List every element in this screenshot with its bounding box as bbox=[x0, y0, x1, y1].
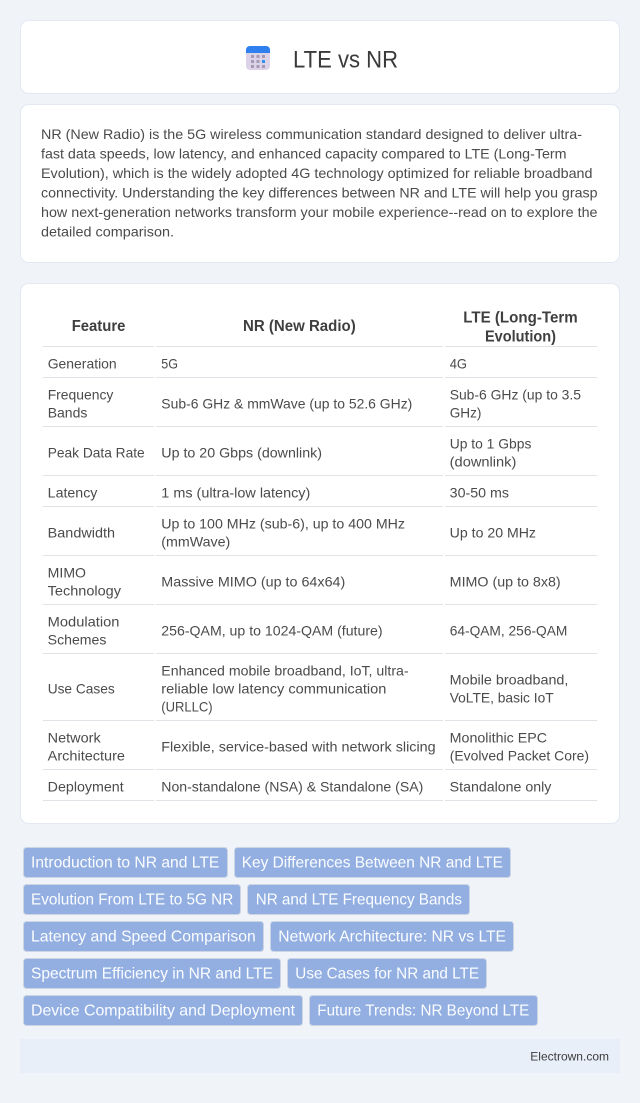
icon: calendar bbox=[246, 46, 270, 70]
row: frequency bands: Bands bbox=[48, 404, 87, 420]
intro paragraph: fast data speeds, low latency, and enhanced capacity compared to LTE (Long-Term bbox=[41, 145, 566, 161]
intro paragraph: Evolution), which is the widely adopted 4G technology optimized for reliable broadband bbox=[41, 165, 592, 181]
footer bbox=[20, 1039, 620, 1073]
intro paragraph: NR (New Radio) is the 5G wireless communication standard designed to deliver ultra- bbox=[41, 126, 582, 142]
row: modulation schemes: 256-QAM, up to 1024-QAM (future) bbox=[161, 622, 383, 638]
row: bandwidth: (mmWave) bbox=[161, 533, 230, 549]
row: modulation schemes: Modulation bbox=[48, 613, 119, 629]
row: use cases: (URLLC) bbox=[161, 698, 213, 714]
tag: introduction: Introduction to NR and LTE bbox=[31, 855, 219, 872]
row: frequency bands bbox=[48, 386, 581, 420]
panel: comparison table bbox=[20, 284, 620, 824]
tag: key differences: Key Differences Between NR and LTE bbox=[242, 855, 503, 872]
table header row: LTE (Long-Term bbox=[463, 309, 578, 326]
row: latency bbox=[48, 484, 509, 500]
tag: evolution: Evolution From LTE to 5G NR bbox=[31, 892, 233, 909]
row: network architecture: (Evolved Packet Core) bbox=[450, 747, 589, 763]
row: MIMO technology: Massive MIMO (up to 64x64) bbox=[161, 573, 345, 589]
tag: network architecture: Network Architecture: NR vs LTE bbox=[278, 929, 506, 946]
row: bandwidth bbox=[48, 515, 536, 549]
tag: use cases: Use Cases for NR and LTE bbox=[295, 966, 479, 983]
row: deployment: Deployment bbox=[48, 778, 124, 794]
row: use cases: VoLTE, basic IoT bbox=[450, 689, 554, 705]
topic tags bbox=[24, 848, 538, 1026]
footer credit: Electrown.com bbox=[530, 1049, 609, 1063]
table header row: Evolution) bbox=[485, 328, 556, 345]
tag: spectrum efficiency: Spectrum Efficiency in NR and LTE bbox=[31, 966, 273, 983]
tag: frequency bands: NR and LTE Frequency Bands bbox=[256, 892, 462, 909]
intro paragraph: detailed comparison. bbox=[41, 223, 174, 239]
panel: title header bbox=[20, 20, 620, 94]
row: MIMO technology: Technology bbox=[48, 582, 121, 598]
row: modulation schemes: Schemes bbox=[48, 631, 106, 647]
row: generation: 4G bbox=[450, 355, 467, 371]
row: MIMO technology: MIMO (up to 8x8) bbox=[450, 573, 561, 589]
row: deployment: Standalone only bbox=[450, 778, 551, 794]
table header row: Feature bbox=[72, 318, 125, 335]
row: generation: Generation bbox=[48, 355, 117, 371]
table header row: NR (New Radio) bbox=[243, 318, 356, 335]
row: bandwidth: Bandwidth bbox=[48, 524, 115, 540]
row: modulation schemes bbox=[48, 613, 567, 647]
row: bandwidth: Up to 100 MHz (sub-6), up to 400 MHz bbox=[161, 515, 405, 531]
row: frequency bands: GHz) bbox=[450, 404, 481, 420]
row: MIMO technology bbox=[48, 564, 561, 598]
row: frequency bands: Sub-6 GHz & mmWave (up to 52.6 GHz) bbox=[161, 395, 412, 411]
row: network architecture bbox=[48, 729, 589, 763]
row: deployment: Non-standalone (NSA) & Standalone (SA) bbox=[161, 778, 423, 794]
row: deployment bbox=[48, 778, 551, 794]
tag: device compatibility: Device Compatibility and Deployment bbox=[31, 1003, 296, 1020]
row: use cases: Enhanced mobile broadband, IoT, ultra- bbox=[161, 662, 409, 678]
tag: latency and speed: Latency and Speed Comparison bbox=[31, 929, 256, 946]
row: network architecture: Flexible, service-based with network slicing bbox=[161, 738, 436, 754]
row: peak data rate: (downlink) bbox=[450, 453, 516, 469]
row: network architecture: Network bbox=[48, 729, 102, 745]
row: use cases bbox=[48, 662, 568, 714]
panel: introduction bbox=[20, 104, 620, 262]
tag: introduction bbox=[24, 848, 228, 878]
tag: use cases bbox=[288, 958, 486, 988]
row: bandwidth: Up to 20 MHz bbox=[450, 524, 536, 540]
row: use cases: Mobile broadband, bbox=[450, 671, 568, 687]
row: peak data rate: Up to 1 Gbps bbox=[450, 435, 531, 451]
tag: key differences bbox=[234, 848, 510, 878]
row: network architecture: Monolithic EPC bbox=[450, 729, 547, 745]
row: modulation schemes: 64-QAM, 256-QAM bbox=[450, 622, 567, 638]
row: peak data rate bbox=[48, 435, 531, 469]
intro paragraph: how next-generation networks transform your mobile experience--read on to explore the bbox=[41, 204, 598, 220]
row: peak data rate: Peak Data Rate bbox=[48, 444, 145, 460]
title: LTE vs NR bbox=[293, 46, 398, 73]
row: latency: 1 ms (ultra-low latency) bbox=[161, 484, 310, 500]
row: network architecture: Architecture bbox=[48, 747, 125, 763]
row: latency: Latency bbox=[48, 484, 97, 500]
tag: future trends bbox=[310, 996, 538, 1026]
row: frequency bands: Frequency bbox=[48, 386, 113, 402]
tag: future trends: Future Trends: NR Beyond LTE bbox=[317, 1003, 529, 1020]
tag: device compatibility bbox=[24, 996, 302, 1026]
intro paragraph: connectivity. Understanding the key differences between NR and LTE will help you grasp bbox=[41, 184, 598, 200]
tag: frequency bands bbox=[248, 884, 470, 914]
intro paragraph bbox=[41, 126, 598, 239]
tag: evolution bbox=[24, 884, 240, 914]
row: generation bbox=[48, 355, 467, 371]
table header row bbox=[72, 309, 578, 345]
row: frequency bands: Sub-6 GHz (up to 3.5 bbox=[450, 386, 581, 402]
row: latency: 30-50 ms bbox=[450, 484, 509, 500]
tag: network architecture bbox=[270, 922, 514, 952]
tag: spectrum efficiency bbox=[24, 958, 280, 988]
row: use cases: Use Cases bbox=[48, 680, 115, 696]
row: use cases: reliable low latency communication bbox=[161, 680, 386, 696]
row: MIMO technology: MIMO bbox=[48, 564, 86, 580]
row: peak data rate: Up to 20 Gbps (downlink) bbox=[161, 444, 322, 460]
row: generation: 5G bbox=[161, 355, 178, 371]
tag: latency and speed bbox=[24, 922, 264, 952]
